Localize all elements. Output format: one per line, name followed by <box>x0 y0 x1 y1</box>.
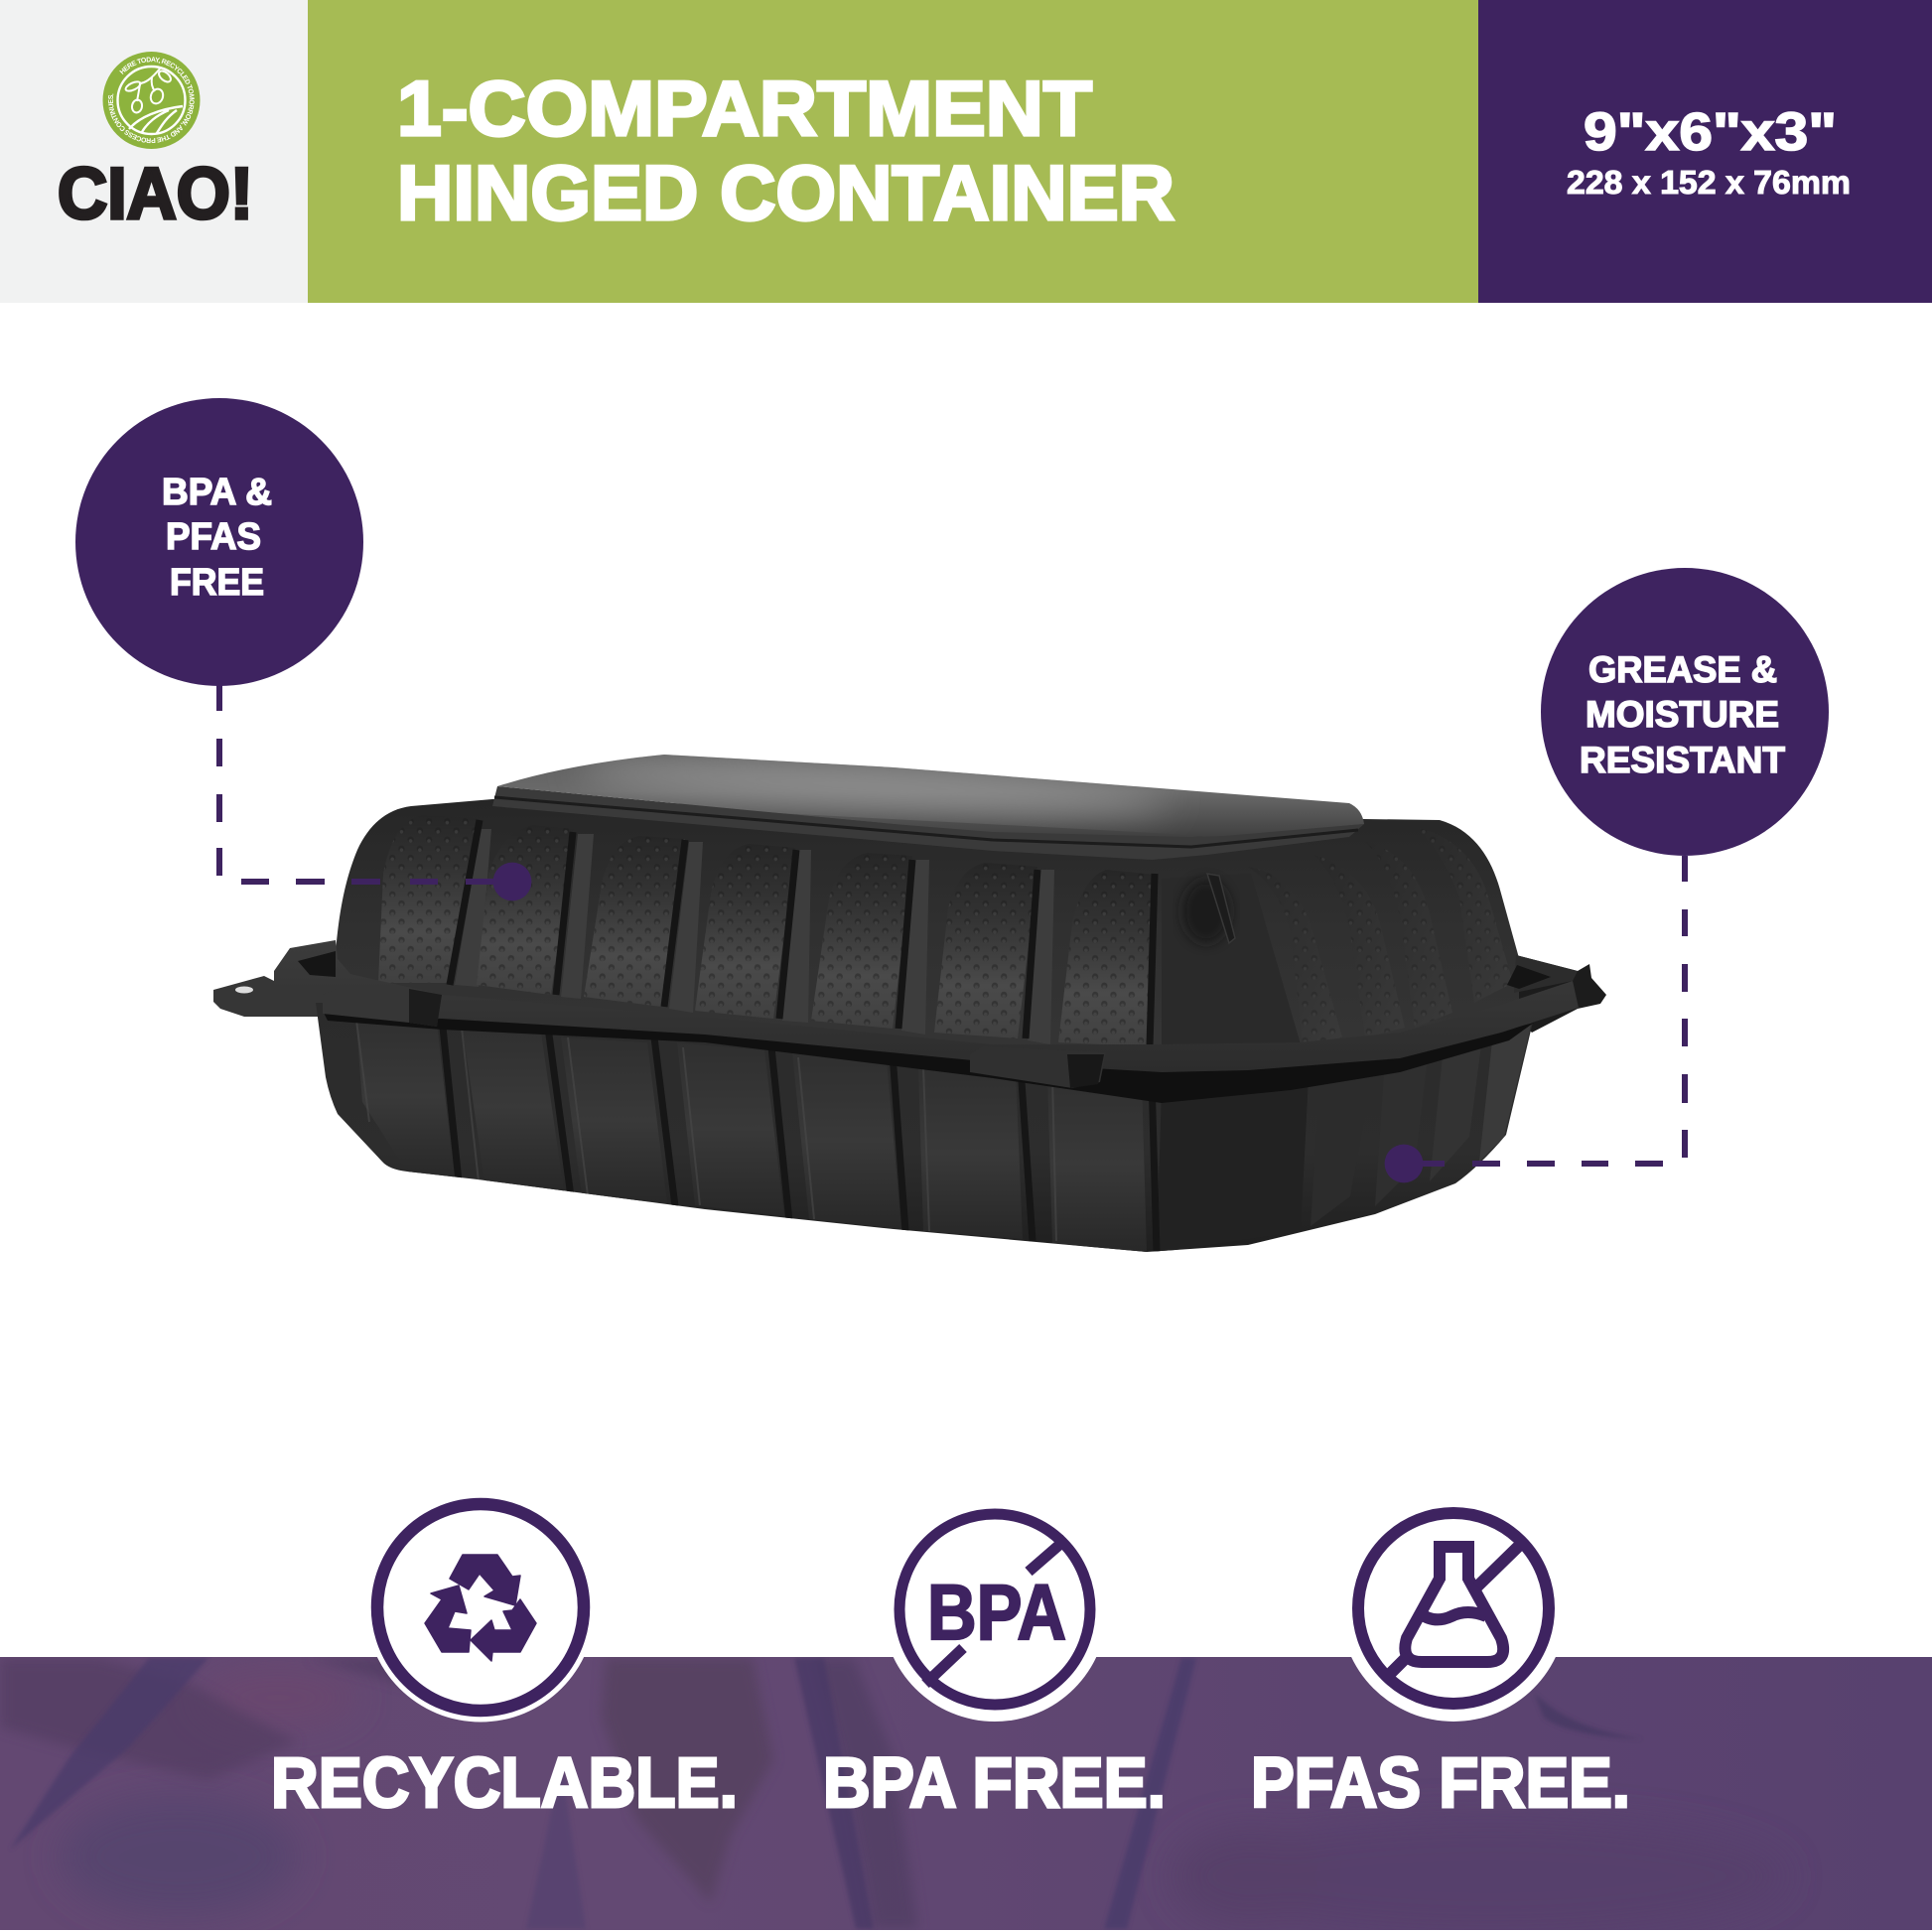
dark gap under the rim <box>323 1011 1534 1103</box>
label: BPA free: BPA FREE. <box>823 1744 1166 1823</box>
title <box>397 65 1174 236</box>
title: HINGED CONTAINER <box>397 149 1174 236</box>
base tray <box>316 1003 1534 1253</box>
header: dimensions panel <box>1478 0 1932 303</box>
ribs lighter strips <box>455 829 1054 1044</box>
callout circle left <box>75 398 363 686</box>
left hinge tab <box>213 976 330 1017</box>
side curved panels <box>1248 827 1513 1044</box>
latch left <box>323 985 442 1027</box>
textured panels <box>378 815 1155 1046</box>
callout text right: GREASE & <box>1588 649 1777 690</box>
title: 1-COMPARTMENT <box>397 65 1092 152</box>
icon: recyclable <box>365 1493 596 1722</box>
header: logo panel <box>0 0 308 303</box>
callout text left: BPA & <box>162 472 272 513</box>
right rear flange <box>1489 955 1606 1033</box>
callout text right <box>1580 649 1785 780</box>
logo wordmark: CIAO! <box>58 154 253 234</box>
header: green title panel <box>308 0 1478 303</box>
dimensions imperial: 9"x6"x3" <box>1584 102 1837 162</box>
callout text right: RESISTANT <box>1580 740 1785 780</box>
callout: grease and moisture resistant <box>1385 568 1829 1182</box>
callout text left: PFAS <box>166 516 261 558</box>
icon: PFAS free flask <box>1340 1495 1567 1722</box>
dimensions metric: 228 x 152 x 76mm <box>1567 164 1851 201</box>
callout text left <box>162 472 272 604</box>
top plateau <box>497 751 1364 837</box>
leader line left <box>216 685 531 900</box>
lid dome <box>334 799 1519 1062</box>
callout text left: FREE <box>170 562 264 604</box>
icon: BPA free <box>883 1497 1107 1722</box>
leader line right <box>1385 856 1688 1182</box>
top plateau side band <box>492 786 1364 860</box>
icon: round olive branch badge: HERE TODAY, RECYCLED TOMORROW, AND THE PROCESS CONTINUES. <box>108 57 195 143</box>
latch right <box>970 1046 1106 1088</box>
callout circle right <box>1541 568 1829 856</box>
label: PFAS free: PFAS FREE. <box>1251 1744 1630 1823</box>
label: recyclable: RECYCLABLE. <box>271 1744 738 1823</box>
callout text right: MOISTURE <box>1586 694 1779 735</box>
rim band <box>274 940 1579 1088</box>
corner smooth area <box>1162 979 1300 1044</box>
product photo: black hinged container <box>213 751 1606 1253</box>
bottom band with leaf background <box>0 1657 1932 1932</box>
grooves <box>450 820 1155 1046</box>
callout: BPA & PFAS free <box>75 398 531 900</box>
icon: BPA free: BPA <box>927 1568 1066 1656</box>
